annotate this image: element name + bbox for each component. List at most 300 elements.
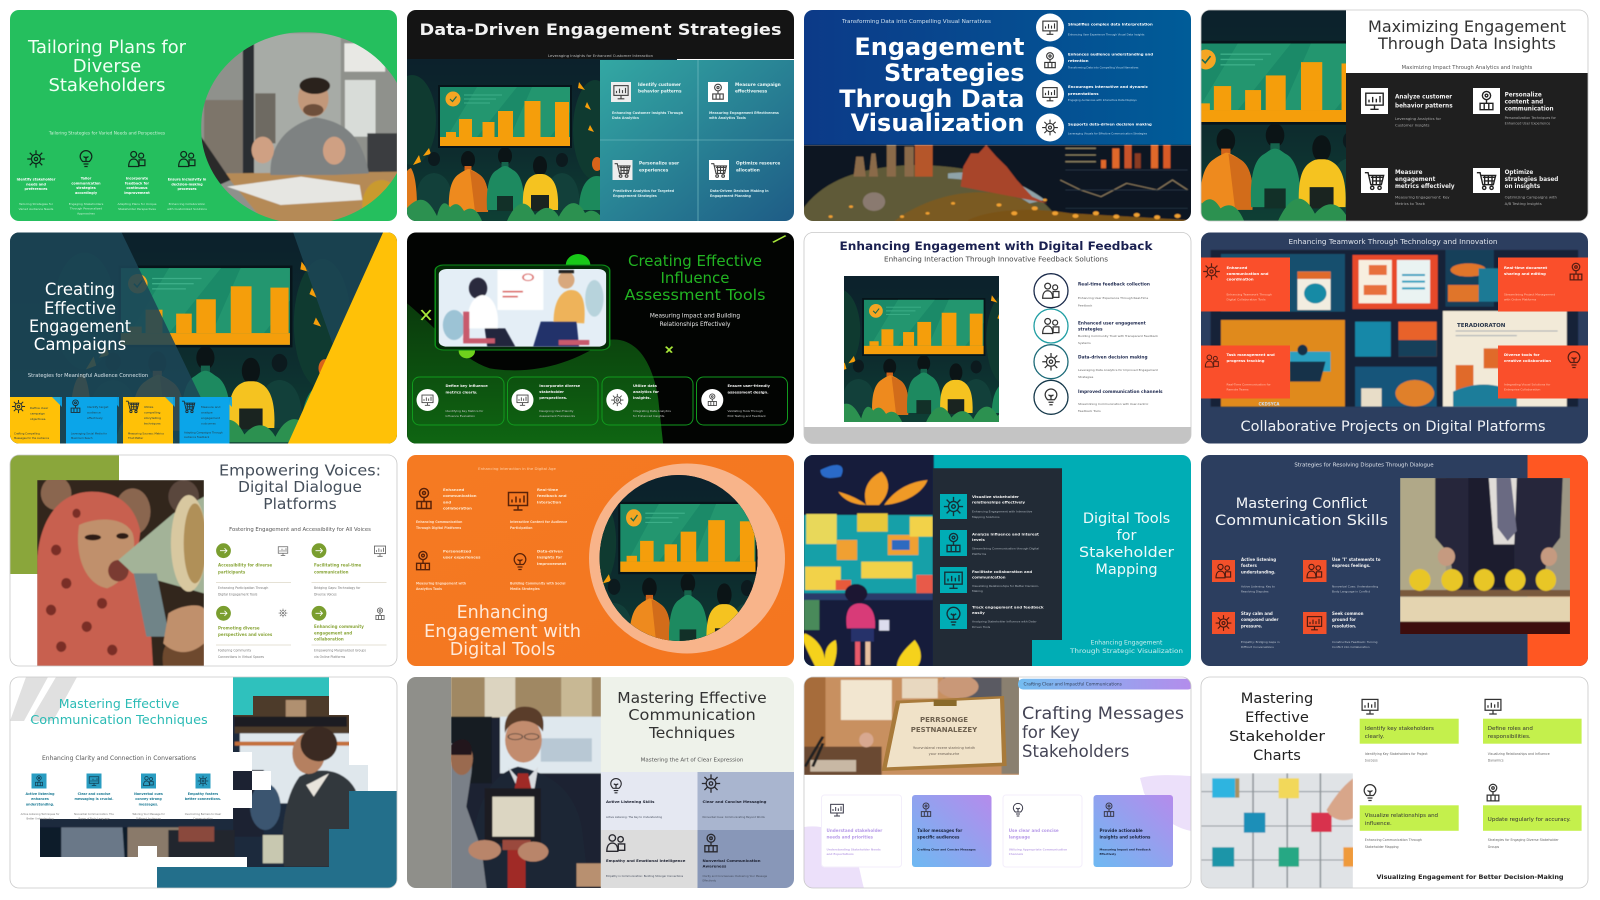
card headings: Enhanced <box>1226 265 1248 270</box>
subtitle: Measuring Impact and Building <box>650 314 740 320</box>
footer caption: Visualizing Engagement for Better Decision-Making <box>1376 875 1564 881</box>
card headings: specific audiences <box>917 834 960 840</box>
technique labels: convey strong <box>135 797 162 801</box>
card headings: engagement <box>201 416 221 420</box>
title <box>1079 511 1174 578</box>
feedback headings: Improved communication channels <box>1078 389 1163 395</box>
card headings: creative collaboration <box>1504 358 1551 363</box>
card headings: analytics for <box>633 390 659 394</box>
title: for <box>1117 528 1137 544</box>
card headings: Ensure user-friendly <box>728 384 770 388</box>
item headings: Accessibility for diverse <box>218 562 272 568</box>
teal and blue blocks <box>157 677 398 895</box>
card headings: compelling <box>144 410 161 414</box>
card headings: language <box>1009 834 1030 840</box>
header <box>1346 10 1504 73</box>
item headings: effectiveness <box>735 88 768 94</box>
title: Mastering Conflict <box>1236 496 1368 512</box>
collage labels: CKDSYCA <box>1258 402 1280 406</box>
quadrant descriptions: Nonverbal Cues: Communicating Beyond Words <box>702 815 765 819</box>
card descriptions: Crafting Clear and Concise Messages <box>917 848 976 852</box>
card descriptions: Enhancing Teamwork Through <box>1226 292 1272 296</box>
item headings: strategies based <box>1505 177 1558 183</box>
item descriptions: Active Listening: Key to <box>1241 584 1275 588</box>
title: Diverse <box>73 56 141 77</box>
item descriptions: Resolving Disputes <box>1241 590 1269 594</box>
card headings: Utilize <box>144 405 153 409</box>
stakeholder labels: preferences <box>25 187 47 191</box>
descriptions: Dynamics <box>1488 758 1504 762</box>
panel: Creating Effective Engagement Campaigns <box>10 232 397 444</box>
stakeholder labels: Incorporate <box>126 176 149 180</box>
benefit descriptions: Engaging Audiences with Interactive Data Displays <box>1068 98 1137 102</box>
descriptions: Visualizing Relationships and Influence <box>1488 752 1550 756</box>
item descriptions: Data-Driven Decision Making in <box>710 189 769 193</box>
item descriptions <box>1395 116 1557 206</box>
technique labels <box>26 792 221 806</box>
item headings: communication <box>1505 106 1554 112</box>
descriptions: Stakeholder Mapping <box>1365 845 1399 849</box>
title <box>28 40 186 92</box>
technique labels: Empathy fosters <box>188 792 218 796</box>
item headings: understanding. <box>1241 570 1276 574</box>
card descriptions: and Expectations <box>826 852 854 856</box>
subtitle <box>1069 640 1183 655</box>
item descriptions: Connections in Virtual Spaces <box>218 655 264 659</box>
descriptions: Enhancing Communication Through <box>1365 838 1422 842</box>
stakeholder labels <box>17 176 207 195</box>
title: Communication <box>628 706 756 724</box>
card headings: analyze <box>201 410 213 414</box>
stakeholder labels: improvement <box>124 191 150 195</box>
card descriptions: Crafting Compelling <box>14 432 40 436</box>
quadrant headings: Awareness <box>702 864 727 868</box>
card headings: perspectives. <box>539 396 568 400</box>
card descriptions <box>446 409 766 418</box>
card headings: insights and solutions <box>1100 834 1151 840</box>
highlight text: Update regularly for accuracy. <box>1488 817 1571 823</box>
dividers <box>216 582 386 645</box>
subtitle <box>650 314 740 328</box>
panel: Enhancing Engagement with Digital Feedback <box>769 232 1191 459</box>
item headings: Facilitate collaboration and <box>972 569 1032 574</box>
item headings: Enhanced <box>443 487 465 492</box>
item headings: communication <box>443 493 477 498</box>
item headings: communication <box>314 570 349 574</box>
stakeholder labels: decision-making <box>171 182 203 186</box>
card headings: Task management and <box>1226 352 1275 357</box>
card descriptions: That Matter <box>128 436 144 440</box>
photo: man in dark suit <box>31 690 378 877</box>
item descriptions: Participation <box>510 526 532 530</box>
item descriptions: Enhancing Engagement with Interactive <box>972 510 1032 514</box>
quadrant headings: Nonverbal Communication <box>702 858 761 863</box>
technique labels: messaging is crucial. <box>74 797 114 801</box>
item descriptions: Through Digital Platforms <box>416 526 461 530</box>
item descriptions: Engagement Planning <box>710 194 751 198</box>
circular icons <box>1036 14 1064 142</box>
card descriptions: Channels <box>1009 852 1023 856</box>
top caption: Transforming Data into Compelling Visual Narratives <box>841 19 991 25</box>
item headings: interaction <box>537 500 561 504</box>
title: Techniques <box>648 724 735 742</box>
benefit headings <box>1068 22 1153 126</box>
item descriptions: Metrics to Track <box>1395 201 1426 206</box>
title: Creating Effective <box>628 252 762 270</box>
title: Effective <box>44 299 116 318</box>
item descriptions: A/B Testing Insights <box>1505 201 1542 206</box>
feedback headings: Enhanced user engagement <box>1078 320 1146 326</box>
card headings: progress tracking <box>1226 358 1265 363</box>
dark content panel <box>933 468 1062 666</box>
panel: Data-Driven Engagement Strategies <box>407 10 794 221</box>
banner caption: Crafting Clear and Impactful Communications <box>1024 682 1123 688</box>
title: for Key <box>1022 723 1080 742</box>
item descriptions: Leveraging Analytics for <box>1395 116 1441 121</box>
benefit headings: retention <box>1068 58 1089 63</box>
title: Stakeholders <box>1022 742 1129 761</box>
benefit descriptions: Transforming Data into Compelling Visual Narratives <box>1067 66 1139 70</box>
highlight text: Identify key stakeholders <box>1365 726 1434 732</box>
card descriptions: Enterprise Collaboration <box>1504 388 1540 392</box>
card descriptions: Influence Evaluation <box>446 414 475 418</box>
card headings: Tailor messages for <box>917 828 962 833</box>
title <box>424 603 581 660</box>
card descriptions: Integrating Visual Solutions for <box>1504 382 1551 386</box>
title: Through Data <box>839 85 1024 113</box>
card headings: Measure and <box>201 405 220 409</box>
title: Campaigns <box>34 335 126 354</box>
card icons <box>1203 263 1582 368</box>
item descriptions <box>416 520 567 591</box>
subtitle: Mastering the Art of Clear Expression <box>641 758 744 764</box>
item headings: perspectives and voices <box>218 632 273 637</box>
photo: person holding sign <box>800 675 1019 775</box>
card descriptions: Messages for the Audience <box>14 436 49 440</box>
item headings: allocation <box>736 168 760 174</box>
card descriptions: Measuring Impact and Feedback <box>1100 848 1151 852</box>
item headings: Track engagement and feedback <box>972 604 1044 610</box>
item headings: communication <box>972 574 1006 580</box>
panel: Crafting Messages for Key Stakeholders <box>800 675 1193 888</box>
descriptions <box>1365 752 1559 849</box>
sign text <box>911 716 978 756</box>
panel: Mastering Effective Communication Techniques (teal) <box>10 677 398 895</box>
benefit headings: Supports data-driven decision making <box>1068 122 1152 126</box>
item descriptions: Interactive Content for Audience <box>510 520 567 524</box>
highlight text: responsibilities. <box>1488 734 1531 740</box>
stakeholder labels: continuous <box>126 186 148 190</box>
photo: data landscape <box>800 145 1198 227</box>
card descriptions: Maximum Reach <box>71 436 93 440</box>
title: Data-Driven Engagement Strategies <box>420 20 782 39</box>
technique descriptions: Better Understanding <box>26 816 54 820</box>
card headings: coordination <box>1226 276 1254 282</box>
panel: Mastering Effective Stakeholder Charts <box>1201 677 1588 888</box>
icons <box>611 82 729 180</box>
card descriptions <box>1226 292 1556 392</box>
icons row <box>27 150 195 168</box>
icons <box>417 488 528 570</box>
photo: woman with megaphone <box>37 477 207 667</box>
white notches <box>138 752 271 865</box>
benefit headings: Enhances audience understanding and <box>1068 52 1153 56</box>
descriptions: Groups <box>1488 845 1500 849</box>
item descriptions: Enhancing Communication <box>416 520 462 524</box>
item icons <box>1212 560 1326 634</box>
item headings: Data-driven <box>537 548 563 554</box>
item headings: and <box>443 500 451 504</box>
benefit headings: presentations <box>1068 91 1099 96</box>
item headings: collaboration <box>314 636 344 642</box>
stakeholder labels: Ensure inclusivity in <box>168 178 207 182</box>
illustration: audience and chart <box>10 232 397 444</box>
item headings: Personalize <box>1505 92 1542 98</box>
collage illustration <box>1211 250 1578 407</box>
title <box>617 689 767 742</box>
decorative lilac shapes <box>804 775 1191 888</box>
item descriptions <box>218 586 366 659</box>
card descriptions: Streamlining Project Management <box>1504 292 1556 296</box>
orange strip <box>1528 455 1588 666</box>
stakeholder labels: needs and <box>26 182 46 186</box>
card descriptions: with Online Platforms <box>1504 298 1537 302</box>
item descriptions: Data Analytics <box>612 116 639 120</box>
card descriptions: for Enhanced Insights <box>633 414 665 418</box>
photo: suit and smiley eggs <box>1400 478 1570 635</box>
item descriptions: Fostering Community <box>218 648 251 652</box>
item headings: Use "I" statements to <box>1332 557 1381 562</box>
highlight text: Define roles and <box>1488 726 1533 732</box>
illustration: audience and chart <box>1201 10 1346 221</box>
stakeholder descriptions: Stakeholder Perspectives <box>118 207 156 211</box>
technique labels: enhances <box>31 797 49 801</box>
technique descriptions: Power of Body Language <box>78 816 110 820</box>
item descriptions <box>612 111 779 198</box>
quotation mark shape <box>10 677 77 721</box>
item descriptions: Empathy: Bridging Gaps in <box>1241 640 1280 644</box>
title: Assessment Tools <box>624 286 766 304</box>
feedback descriptions: Leveraging Data Analytics for Improved Engagement <box>1078 368 1159 372</box>
item headings: behavior patterns <box>638 88 682 94</box>
item descriptions: Enhancing Customer Insights Through <box>612 111 684 115</box>
item headings: Optimize resource <box>736 160 780 166</box>
subtitle: Tailoring Strategies for Varied Needs and Perspectives <box>48 130 166 136</box>
illustration: audience and chart <box>769 238 1082 459</box>
stakeholder descriptions: Varied Audience Needs <box>19 207 54 211</box>
stakeholder descriptions: Engaging Stakeholders <box>69 202 104 206</box>
item descriptions: Diverse Voices <box>314 592 337 596</box>
highlight text: Visualize relationships and <box>1365 813 1438 819</box>
technique descriptions: Nonverbal Communication: The <box>74 812 114 816</box>
yellow wedge <box>288 232 400 444</box>
technique labels: better connections. <box>185 797 221 801</box>
card headings: Understand stakeholder <box>826 828 882 833</box>
title: Empowering Voices: <box>219 462 381 480</box>
item headings: levels <box>972 537 985 542</box>
card headings: Utilize data <box>633 384 657 388</box>
item descriptions: with Analytics Tools <box>709 116 746 120</box>
stakeholder descriptions: Enhancing Collaboration <box>169 202 205 206</box>
item descriptions: Measuring Engagement: Key <box>1395 194 1450 200</box>
descriptions: Identifying Key Stakeholders for Project <box>1365 752 1428 756</box>
title: Communication Techniques <box>30 712 208 727</box>
card descriptions: Real-Time Communication for <box>1226 382 1272 386</box>
illustration: audience and chart <box>407 59 677 221</box>
item descriptions: Mapping Solutions <box>972 515 1000 519</box>
item descriptions: Enhancing Participation Through <box>218 586 268 590</box>
item descriptions: Building Community with Social <box>510 582 565 586</box>
item headings: Personalize user <box>639 160 680 166</box>
sign text: PERRSONGE <box>920 716 968 724</box>
dark overlay shapes <box>10 232 383 444</box>
descriptions: Success <box>1365 758 1378 762</box>
title: Engagement <box>29 317 132 336</box>
item headings: Facilitating real-time <box>314 562 362 568</box>
ring <box>589 464 785 654</box>
card headings: Incorporate diverse <box>539 384 581 388</box>
subtitle: Enhancing Engagement <box>1091 640 1163 646</box>
technique descriptions: Tailoring Your Message for <box>132 812 166 816</box>
stakeholder labels: strategies <box>76 186 96 190</box>
panel: Digital Tools for Stakeholder Mapping <box>800 453 1191 667</box>
item headings: feedback and <box>537 493 567 498</box>
title: Mastering Effective <box>617 689 767 707</box>
item headings: metrics effectively <box>1395 184 1455 190</box>
subtitle: Relationships Effectively <box>660 322 731 328</box>
top caption: Enhancing Interaction in the Digital Age <box>478 466 556 471</box>
title: Mastering <box>1241 690 1313 707</box>
quadrant descriptions <box>606 815 767 882</box>
item descriptions: Predictive Analytics for Targeted <box>613 189 675 193</box>
title: Engagement with <box>424 622 581 642</box>
title <box>1370 20 1566 52</box>
card headings: storytelling <box>144 416 161 420</box>
top caption: Strategies for Resolving Disputes Through Dialogue <box>1294 462 1434 468</box>
feedback descriptions: Systems <box>1078 341 1091 345</box>
benefit headings: Simplifies complex data interpretation <box>1068 22 1153 26</box>
feedback descriptions: Feedback <box>1078 304 1093 308</box>
item headings: Active listening <box>1241 557 1276 562</box>
quadrants <box>601 772 794 888</box>
benefit descriptions <box>1067 32 1148 136</box>
card headings: Provide actionable <box>1100 828 1143 833</box>
card headings: effectively <box>87 416 103 420</box>
card descriptions: Digital Collaboration Tools <box>1226 298 1266 302</box>
title: Platforms <box>263 495 337 513</box>
title: Tailoring Plans for <box>27 37 187 58</box>
panel: Creating Effective Influence Assessment Tools <box>407 232 794 445</box>
card headings: insights. <box>633 396 652 400</box>
feedback descriptions: Feedback Tools <box>1078 409 1101 413</box>
card headings: Diverse tools for <box>1504 352 1540 357</box>
item descriptions: Optimizing Campaigns with <box>1505 194 1557 200</box>
top banner <box>1018 679 1193 690</box>
item headings: ground for <box>1332 617 1356 622</box>
item headings: behavior patterns <box>1395 104 1453 110</box>
stakeholder labels: communication <box>71 182 101 186</box>
quadrant icons <box>607 774 720 852</box>
title <box>839 33 1024 137</box>
item headings: content and <box>1505 100 1543 106</box>
card headings: needs and priorities <box>826 834 874 840</box>
card descriptions: Measuring Success: Metrics <box>128 432 165 436</box>
item descriptions: Difficult Conversations <box>1241 645 1274 649</box>
item descriptions <box>1241 584 1378 649</box>
quadrant descriptions: Active Listening: The Key to Understanding <box>606 815 662 819</box>
descriptions: Strategies for Engaging Diverse Stakeholder <box>1488 838 1559 842</box>
stakeholder labels: accordingly <box>75 191 98 195</box>
item headings: Enhancing community <box>314 624 364 629</box>
panel: Collaborative Projects on Digital Platforms <box>1201 232 1588 444</box>
feedback descriptions: Building Community Trust with Transparent Feedback <box>1078 334 1158 338</box>
item headings: Analyze influence and interest <box>972 532 1039 536</box>
card descriptions: Assessment Frameworks <box>539 414 576 418</box>
item headings: Measure <box>1395 170 1423 176</box>
item descriptions: via Online Platforms <box>314 655 346 659</box>
small icons <box>278 546 386 620</box>
technique labels: Clear and concise <box>78 792 111 796</box>
technique labels: messages. <box>139 802 158 806</box>
item headings: on insights <box>1505 184 1541 190</box>
grey footer <box>804 427 1191 444</box>
item headings: Stay calm and <box>1241 611 1273 616</box>
technique labels: understanding. <box>26 802 54 806</box>
stakeholder descriptions: with Customized Solutions <box>167 207 207 211</box>
item descriptions: Analytics Tools <box>416 587 442 591</box>
sign text: Yourvnisleral recere starining hetdh <box>913 746 975 750</box>
technique descriptions: Different Audiences <box>136 816 162 820</box>
title <box>624 252 766 304</box>
item descriptions: Constructive Feedback: Turning <box>1332 640 1378 644</box>
benefit headings: Encourages interactive and dynamic <box>1068 84 1149 89</box>
card descriptions: Identifying Key Metrics for <box>446 409 484 413</box>
icons <box>1362 699 1501 801</box>
header bar <box>407 10 794 59</box>
technique descriptions <box>21 812 222 820</box>
item descriptions: Body Language in Conflict <box>1332 590 1371 594</box>
card headings <box>1226 265 1551 363</box>
stakeholder descriptions: Tailoring Strategies for <box>18 202 54 206</box>
panel: Maximizing Engagement Through Data Insights <box>1201 10 1588 221</box>
grey strip <box>407 677 451 888</box>
card headings: techniques <box>144 422 161 426</box>
title: Effective <box>1245 709 1309 726</box>
card headings <box>30 405 221 426</box>
item headings: express feelings. <box>1332 563 1371 568</box>
item descriptions: Media Strategies <box>510 587 540 591</box>
item descriptions: Analyzing Stakeholder Influence with Data- <box>972 620 1037 624</box>
quadrant headings: Clear and Concise Messaging <box>702 799 767 804</box>
subtitle: Leveraging Insights for Enhanced Customer Interaction <box>548 53 654 58</box>
subtitle: Enhancing Clarity and Connection in Conversations <box>42 755 196 762</box>
card headings: Define key influence <box>446 384 488 388</box>
item headings: Promoting diverse <box>218 626 260 630</box>
stakeholder labels: processes <box>177 187 197 191</box>
panel: Engagement Strategies Through Data Visualization <box>800 10 1198 227</box>
card headings: Real-time document <box>1504 265 1547 270</box>
item icons <box>940 494 967 629</box>
item headings <box>1241 557 1381 628</box>
item descriptions: Making <box>972 589 983 593</box>
stakeholder descriptions: Approaches <box>77 211 95 215</box>
item headings: Personalized <box>443 548 471 554</box>
item headings: fosters <box>1241 563 1257 568</box>
subtitle: Maximizing Impact Through Analytics and Insights <box>1402 65 1533 71</box>
title <box>219 462 381 513</box>
technique icons <box>32 774 210 788</box>
item descriptions: Enhanced User Experience <box>1505 122 1550 126</box>
